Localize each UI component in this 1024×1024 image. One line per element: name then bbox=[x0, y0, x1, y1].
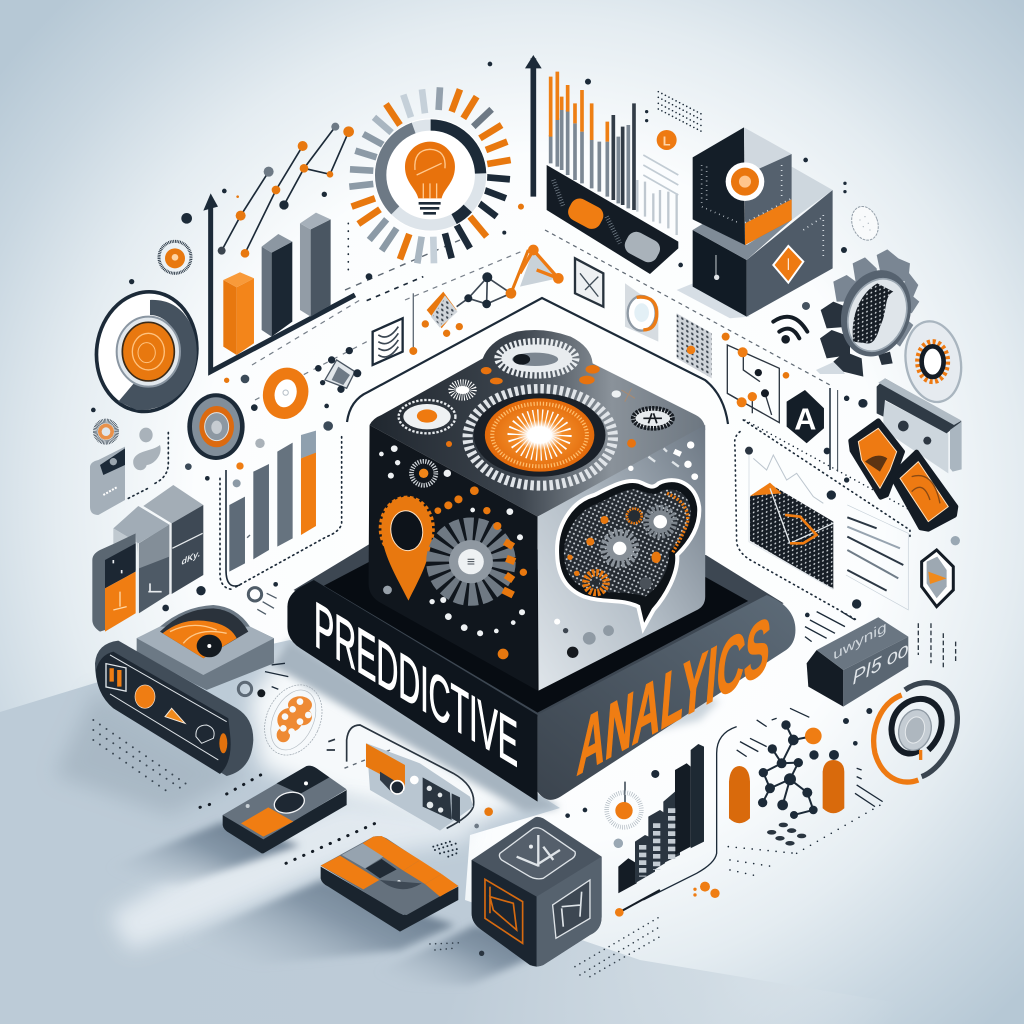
icon: phone and blob bbox=[90, 428, 161, 515]
icon: shield with letter: A bbox=[794, 402, 816, 436]
dotted divider bbox=[346, 223, 351, 273]
icon: bar stair chart bbox=[618, 744, 704, 893]
cube top face bbox=[370, 330, 705, 517]
icon: labelled block: PI5 oo bbox=[853, 637, 909, 690]
icon: cog seal bbox=[847, 203, 883, 244]
shadow of stacked cube bbox=[677, 283, 750, 318]
icon: orange cards bbox=[851, 421, 956, 529]
icon: rounded control pill bbox=[95, 641, 253, 776]
icon: small dial bbox=[607, 782, 641, 827]
trend points bbox=[218, 123, 354, 258]
vertical dashes bbox=[918, 623, 956, 670]
bar: dark bbox=[262, 234, 292, 337]
scatter dots bbox=[585, 79, 868, 408]
connector with orange node bbox=[409, 293, 417, 355]
tile: dark and orange bbox=[223, 766, 347, 853]
right face dots bbox=[554, 441, 698, 658]
doc lines bbox=[643, 155, 678, 195]
icon: location pin gear bbox=[381, 497, 432, 601]
icon: node hexagon bbox=[315, 347, 361, 393]
right top gear bbox=[633, 408, 672, 428]
icon: triangle network bbox=[520, 245, 564, 287]
text: PREDDICTIVE bbox=[314, 587, 518, 781]
orange pellets bbox=[693, 882, 720, 898]
icon: gauge target bbox=[89, 285, 205, 418]
cube left face bbox=[369, 425, 538, 691]
left top gear bbox=[399, 400, 455, 433]
icon: circuit box bbox=[727, 345, 779, 423]
icon: small sun bbox=[95, 421, 117, 442]
vertical rule bbox=[836, 390, 839, 472]
trend lines bbox=[222, 127, 349, 253]
icon: labelled block bbox=[807, 617, 909, 707]
icon: stacked cube bbox=[693, 127, 833, 317]
hash lines lower bbox=[737, 708, 883, 807]
tile: orange blocks bbox=[321, 836, 458, 932]
cube left face gear bbox=[411, 461, 436, 485]
icon: brain with gears bbox=[557, 480, 699, 628]
dotted chart frame bbox=[735, 420, 910, 620]
panel: right chart and cards bbox=[607, 378, 962, 900]
line chart bbox=[745, 447, 836, 589]
dot matrix lower bbox=[728, 803, 883, 877]
panel: central platform bbox=[287, 330, 795, 802]
scatter dots bbox=[614, 396, 960, 848]
icon: orange ring disc bbox=[899, 317, 967, 406]
panel: upper-right column chart and cubes bbox=[520, 55, 967, 443]
platform left face bbox=[287, 580, 538, 802]
icon: lock tray bbox=[137, 605, 274, 690]
chart axes bbox=[211, 207, 355, 372]
scatter dots bbox=[91, 62, 524, 448]
dot matrix bbox=[658, 92, 703, 132]
icon: grey wheel bbox=[439, 530, 515, 595]
connector lines bbox=[643, 727, 737, 900]
cube left face dots bbox=[379, 445, 527, 659]
sunburst bbox=[468, 389, 613, 486]
small burst bbox=[452, 383, 473, 397]
cube top accents bbox=[446, 365, 636, 448]
growth arrow bbox=[525, 55, 542, 197]
dot field bbox=[430, 917, 660, 977]
icon: orange coin: L bbox=[663, 134, 671, 148]
icon: dot matrix square bbox=[677, 313, 712, 378]
ring and hash marks bbox=[238, 663, 288, 697]
dark pellets bbox=[767, 823, 806, 846]
icon: rounded cube bbox=[472, 817, 602, 967]
target marks bbox=[248, 588, 277, 614]
icon: network nodes bbox=[422, 250, 528, 337]
column chart bbox=[229, 431, 316, 572]
icon: orange coin bbox=[657, 130, 677, 150]
icon: orange capsules bbox=[729, 760, 844, 823]
text: ANALYICS bbox=[575, 599, 774, 794]
bracket bbox=[327, 725, 474, 828]
icon: light bulb dial bbox=[349, 87, 511, 263]
icon: small framed card bbox=[575, 258, 603, 307]
dot cluster bbox=[433, 842, 460, 857]
panel: upper-left bar chart and trend lines bbox=[89, 62, 528, 460]
icon: battery blocks: dKy. bbox=[182, 548, 200, 567]
ground shadows bbox=[0, 640, 1024, 1024]
chart columns bbox=[551, 72, 677, 235]
icon: small orange gear bbox=[159, 241, 191, 273]
icon: lens disc bbox=[187, 393, 245, 460]
icon: lens card bbox=[625, 283, 658, 342]
icon: labelled block: uwynig bbox=[833, 619, 887, 664]
icon: honeycomb globe bbox=[254, 675, 333, 764]
dotted path bbox=[200, 771, 383, 863]
icon: orange ring bbox=[264, 370, 307, 417]
bar: orange bbox=[223, 272, 254, 355]
icon: large gear bbox=[816, 249, 922, 377]
axis arrow bbox=[203, 193, 218, 211]
icon: framed square bbox=[373, 318, 403, 365]
cube right face bbox=[538, 425, 705, 691]
scatter dots bbox=[474, 770, 659, 956]
icon: concentric target bbox=[874, 683, 957, 782]
icon: app screen bbox=[366, 743, 473, 831]
icon: molecule bbox=[758, 720, 839, 819]
dashed divider bbox=[367, 277, 423, 301]
connector with orange node bbox=[615, 890, 660, 917]
dot field bbox=[93, 720, 190, 793]
text lines panel bbox=[846, 505, 908, 610]
panel: bottom tiles bbox=[200, 725, 660, 977]
icon: shield with letter bbox=[787, 390, 824, 443]
icon: battery blocks bbox=[92, 485, 203, 632]
top gear bbox=[498, 342, 576, 375]
connector lines bbox=[226, 230, 910, 770]
bar: grey bbox=[300, 213, 331, 317]
dotted frame bbox=[128, 430, 342, 589]
icon: small hexagon bbox=[922, 550, 953, 607]
chart base panel bbox=[547, 165, 678, 274]
icon: wifi bbox=[773, 317, 807, 342]
platform right face bbox=[538, 595, 795, 800]
scatter dots bbox=[162, 421, 333, 611]
icon: grey frame bbox=[877, 378, 962, 473]
hash lines bbox=[805, 612, 855, 642]
platform recess bbox=[324, 562, 748, 713]
panel: left bar chart and cards bbox=[90, 421, 342, 793]
platform top bbox=[294, 544, 784, 717]
